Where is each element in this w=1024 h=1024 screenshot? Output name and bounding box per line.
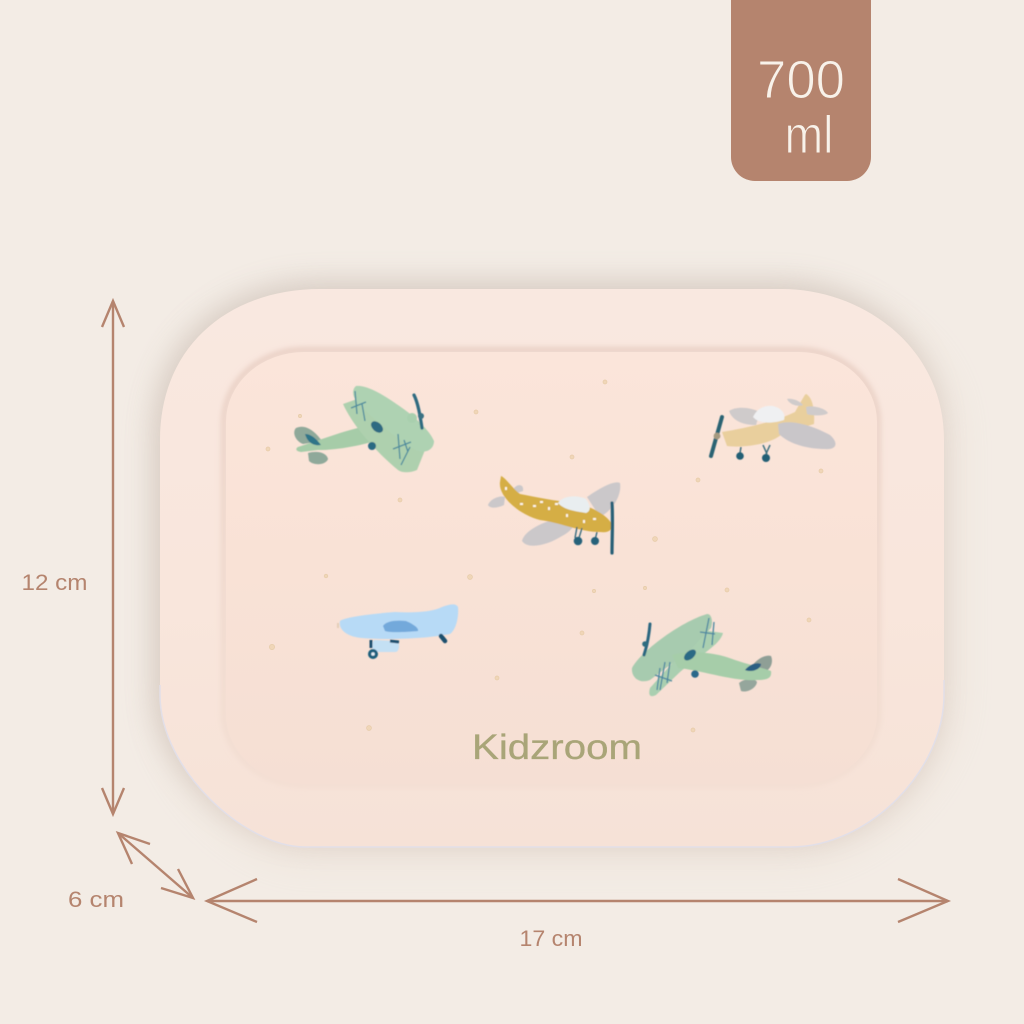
brand name: Kidzroom: [472, 728, 642, 767]
scattered dots: [266, 380, 823, 732]
icon: beige monoplane top right: [711, 394, 835, 462]
depth label: 6 cm: [68, 887, 124, 912]
lunch box lid: [154, 281, 952, 857]
icon: green biplane lower right: [632, 614, 772, 696]
width arrow: [207, 879, 948, 922]
icon: green biplane top left: [294, 386, 434, 472]
icon: blue monoplane lower left: [338, 604, 458, 659]
inner recessed panel: [224, 350, 878, 785]
icon: yellow monoplane centre: [488, 476, 620, 553]
height arrow: [102, 301, 124, 814]
capacity badge: 700 ml: 700: [757, 50, 845, 110]
height label: 12 cm: [22, 570, 88, 595]
capacity badge: 700 ml: [731, 0, 871, 181]
width label: 17 cm: [520, 926, 582, 951]
depth arrow: [118, 833, 193, 898]
capacity badge: 700 ml: ml: [784, 106, 834, 165]
